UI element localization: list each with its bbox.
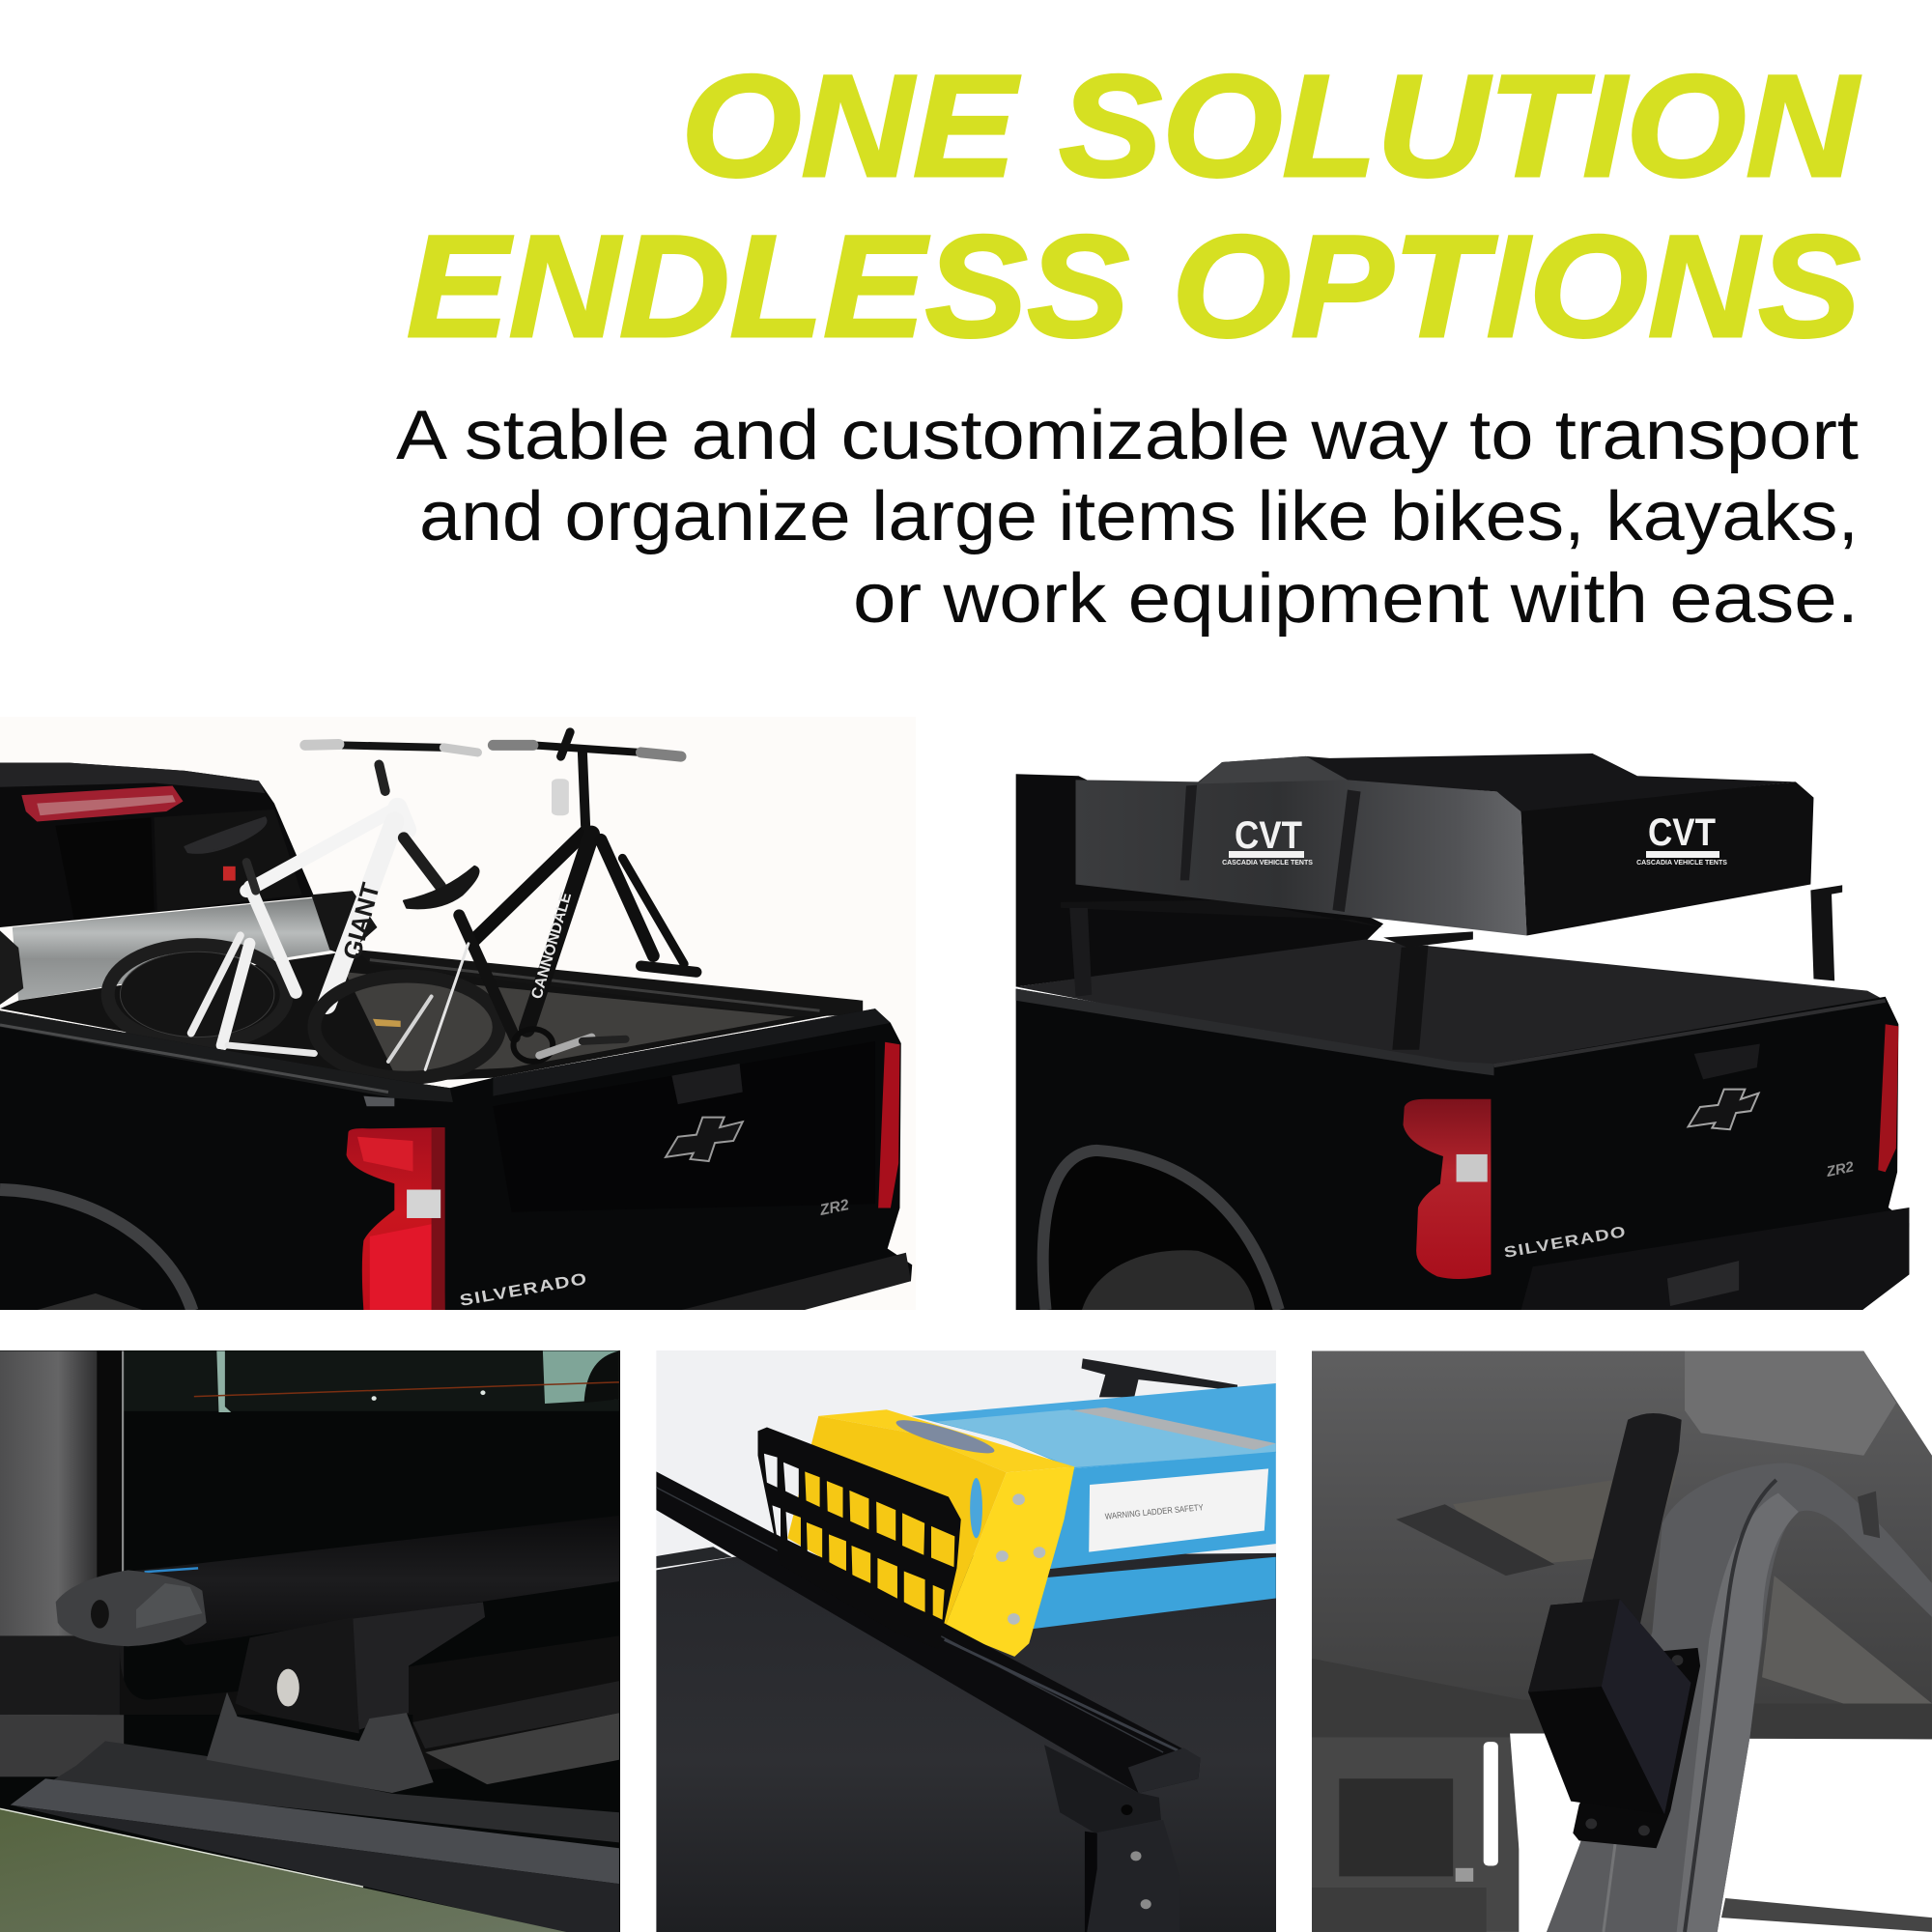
blue ladder [911, 1383, 1276, 1629]
badge: Silverado: SILVERADO [459, 1270, 589, 1310]
tent panel highlights [1396, 1351, 1932, 1703]
title [407, 44, 1861, 367]
truck body [1016, 989, 1909, 1311]
yellow end cap [787, 1409, 1074, 1657]
far rail [656, 1547, 732, 1568]
title: ENDLESS OPTIONS [407, 205, 1861, 367]
rooftop tent [1076, 753, 1813, 935]
panel: crossbar detail [0, 1343, 648, 1932]
tent logo: left: CVT [1235, 814, 1302, 857]
tent underside in grey [1312, 1351, 1932, 1739]
right tail light [1878, 1024, 1898, 1172]
rail bar behind [412, 1681, 619, 1748]
lower window [120, 1635, 619, 1771]
bracket mounting plate [1573, 1648, 1700, 1848]
description text: A stable and customizable way to transport [396, 397, 1859, 474]
panel: side mount bracket [1312, 1343, 1932, 1932]
panel: ladder on rack [656, 1343, 1276, 1932]
description text [396, 397, 1859, 638]
bowtie emblem [1689, 1090, 1759, 1129]
truck bed interior [0, 950, 863, 1082]
black tube post [1582, 1413, 1682, 1625]
wheel arch and tire [1043, 1151, 1279, 1311]
description text: and organize large items like bikes, kayaks, [419, 478, 1859, 555]
badge: ZR2: ZR2 [817, 1197, 850, 1219]
rail end cap [1128, 1747, 1201, 1793]
clamp foot [207, 1602, 485, 1793]
rack uprights and crossbars [1061, 885, 1842, 1050]
dark bed cover [656, 1553, 1276, 1932]
bracket box [1528, 1599, 1690, 1814]
rack handle [1082, 1358, 1237, 1397]
aluminum tube load [0, 891, 377, 1005]
panel: truck with rooftop tent [1016, 753, 1909, 1311]
title: ONE SOLUTION [681, 44, 1861, 207]
truck body [0, 1009, 912, 1311]
arched grey support pillar [1547, 1463, 1932, 1932]
rack bracket [1044, 1745, 1179, 1932]
rear cab through gap [1312, 1734, 1579, 1932]
badge: Silverado: SILVERADO [1503, 1223, 1628, 1261]
crossbar end cap [56, 1570, 207, 1646]
frame text: GIANT: GIANT [337, 880, 385, 963]
right tail light [878, 1042, 899, 1208]
carpet [425, 1713, 619, 1784]
white backdrop [1312, 1343, 1932, 1932]
frame text: Cannondale: CANNONDALE [529, 891, 575, 1001]
tent logo: right: CVT [1648, 811, 1716, 854]
reverse lens [1457, 1154, 1488, 1181]
wheel arch and tire [0, 1190, 192, 1311]
truck cab behind tent [1016, 774, 1383, 987]
panel: truck with two bikes [0, 717, 916, 1311]
black rail [656, 1471, 1201, 1793]
tent logo: left [1222, 814, 1313, 867]
white bike [108, 745, 477, 1053]
window background [0, 1343, 648, 1932]
photo background [0, 717, 916, 1310]
mounting rail [49, 1741, 619, 1842]
tent logo: right: CASCADIA VEHICLE TENTS [1636, 860, 1727, 867]
truck cab [0, 762, 314, 927]
tonneau edge strip [11, 1778, 619, 1884]
tent logo: right [1636, 811, 1727, 867]
lower dark beam [1312, 1659, 1932, 1739]
tail light [347, 1127, 445, 1311]
badge: ZR2: ZR2 [1824, 1158, 1856, 1180]
tent logo: left: CASCADIA VEHICLE TENTS [1222, 860, 1313, 867]
bowtie emblem [666, 1118, 743, 1161]
window reflections [124, 1351, 619, 1412]
rear crossbar [1721, 1898, 1932, 1932]
black grate organizer [758, 1428, 961, 1649]
tail light [1404, 1099, 1491, 1279]
light backdrop [656, 1343, 1276, 1576]
tonneau bed cover [1016, 940, 1886, 1071]
ladder warning label text: WARNING LADDER SAFETY [1104, 1502, 1205, 1521]
dark seam [11, 1804, 619, 1932]
textured pillar [0, 1351, 124, 1776]
black bike [314, 732, 696, 1078]
description text: or work equipment with ease. [853, 560, 1859, 638]
crossbar [124, 1516, 619, 1645]
olive truck panel [0, 1808, 570, 1932]
